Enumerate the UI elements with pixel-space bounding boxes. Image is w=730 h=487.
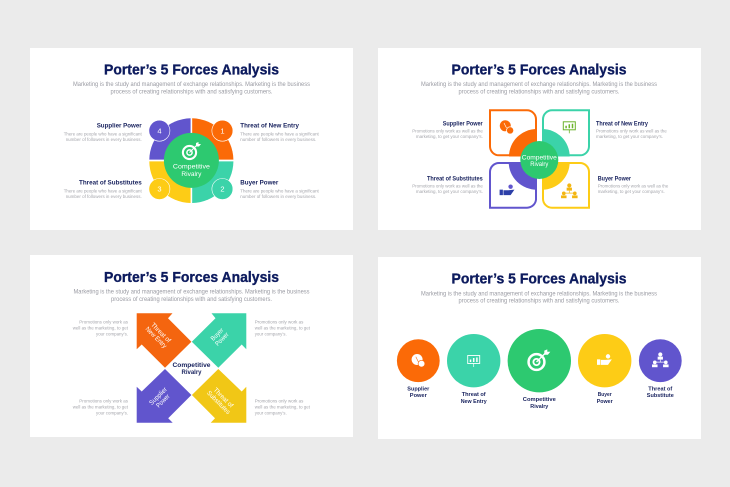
text block: buyer power bbox=[598, 175, 669, 195]
text block: buyer power bbox=[240, 180, 319, 200]
text block: threat of new entry: number of followers in every business. bbox=[240, 137, 316, 143]
circle: buyer power: Power bbox=[597, 399, 613, 405]
arrow: buyer power bbox=[192, 313, 246, 368]
icon: hierarchy bbox=[652, 352, 669, 367]
circle: threat of substitute: Substitute bbox=[647, 393, 675, 399]
text block: buyer power: Buyer Power bbox=[598, 175, 631, 182]
box: yellow with hierarchy icon bbox=[542, 162, 589, 208]
panel: rounded squares diagram bbox=[378, 48, 701, 230]
center label: competitive rivalry bbox=[172, 362, 211, 376]
arrow: buyer power: Power bbox=[214, 331, 231, 348]
subtitle: Marketing is the study and management of exchange relationships. Marketing is the business bbox=[73, 81, 311, 88]
hub: competitive rivalry bbox=[520, 141, 558, 179]
text block: threat of new entry: Threat of New Entry bbox=[596, 121, 648, 128]
subtitle: process of creating relationships with and satisfying customers. bbox=[110, 88, 273, 95]
text block: threat of substitutes: number of followers in every business. bbox=[66, 194, 142, 200]
circle: threat of new entry bbox=[447, 334, 500, 405]
arrow: threat of new entry: Threat of bbox=[149, 322, 172, 344]
icon: hand with coin bbox=[597, 354, 612, 365]
circle: buyer power bbox=[578, 334, 631, 405]
subtitle: process of creating relationships with and satisfying customers. bbox=[458, 88, 620, 95]
subtitle bbox=[74, 289, 310, 303]
text block: buyer power: Promotions only work as well as the bbox=[598, 183, 669, 189]
text block: top left: Promotions only work as bbox=[79, 320, 129, 326]
icon: target bbox=[183, 142, 201, 159]
text block: top right: your company’s. bbox=[255, 331, 287, 337]
arrow: threat of substitutes: Substitutes bbox=[205, 390, 232, 416]
box: teal with presentation icon bbox=[542, 110, 589, 156]
text block: threat of substitutes: Threat of Substitutes bbox=[427, 175, 483, 182]
hub: competitive rivalry: Rivalry bbox=[181, 171, 202, 178]
circle: threat of substitute bbox=[639, 339, 682, 399]
text block: bottom right: your company’s. bbox=[255, 410, 287, 416]
arrow: buyer power: Buyer bbox=[210, 326, 226, 342]
text block: threat of new entry: Promotions only work as well as the bbox=[596, 128, 667, 134]
text block: top left: your company’s. bbox=[96, 331, 128, 337]
quadrant: threat of new entry bbox=[192, 118, 233, 160]
text block: supplier power bbox=[412, 121, 483, 140]
icon: money bbox=[412, 354, 425, 367]
text block: supplier power: Supplier Power bbox=[97, 122, 142, 129]
arrow: threat of substitutes bbox=[192, 369, 246, 423]
hub: competitive rivalry: Rivalry bbox=[530, 161, 549, 168]
quadrant: threat of substitutes bbox=[149, 161, 191, 203]
text block: threat of substitutes: Promotions only work as well as the bbox=[412, 183, 483, 189]
text block: supplier power: Promotions only work as well as the bbox=[412, 128, 483, 134]
hub: competitive rivalry: Competitive bbox=[522, 154, 557, 161]
icon: presentation chart bbox=[468, 356, 480, 367]
title: Porter’s 5 Forces Analysis bbox=[104, 269, 279, 286]
quadrant: supplier power bbox=[149, 118, 191, 160]
title: Porter’s 5 Forces Analysis bbox=[452, 62, 626, 78]
circle: competitive rivalry: Competitive bbox=[523, 397, 557, 403]
text block: bottom left: your company’s. bbox=[96, 410, 128, 416]
text block: threat of new entry bbox=[596, 121, 667, 140]
icon: money bbox=[500, 120, 514, 134]
text block: buyer power: Buyer Power bbox=[240, 180, 279, 187]
text block: bottom left: Promotions only work as bbox=[79, 399, 129, 405]
title: Porter’s 5 Forces Analysis bbox=[452, 270, 626, 288]
arrow: threat of new entry: New Entry bbox=[144, 326, 168, 350]
text block: buyer power: There are people who have a significant bbox=[240, 188, 319, 194]
circle: threat of new entry: Threat of bbox=[462, 392, 486, 398]
hub: competitive rivalry bbox=[164, 133, 219, 188]
quadrant: buyer power bbox=[192, 161, 233, 203]
center label: competitive rivalry: Rivalry bbox=[182, 369, 202, 376]
arrow: supplier power: Power bbox=[155, 393, 172, 409]
box: purple with hand icon bbox=[490, 162, 537, 208]
text block: threat of substitutes: marketing, to get your company’s. bbox=[416, 189, 483, 195]
text block: supplier power: There are people who have a significant bbox=[64, 131, 142, 137]
icon: presentation chart bbox=[563, 122, 575, 133]
text block: threat of new entry: marketing, to get your company’s. bbox=[596, 134, 663, 140]
icon: target bbox=[529, 349, 550, 370]
text block: bottom left: well as the marketing, to get bbox=[73, 404, 129, 410]
subtitle bbox=[421, 81, 658, 95]
text block: top right: well as the marketing, to get bbox=[255, 325, 311, 331]
text block: top left bbox=[73, 320, 129, 337]
subtitle: process of creating relationships with and satisfying customers. bbox=[111, 296, 272, 303]
circle: supplier power: Supplier bbox=[407, 386, 430, 392]
text block: threat of new entry: There are people who have a significant bbox=[240, 131, 319, 137]
circle: competitive rivalry bbox=[508, 329, 571, 410]
text block: buyer power: number of followers in every business. bbox=[240, 194, 316, 200]
icon: hand with coin bbox=[500, 184, 514, 195]
quadrant: threat of substitutes: 3 bbox=[157, 185, 161, 194]
text block: threat of substitutes: Threat of Substitutes bbox=[79, 180, 142, 187]
text block: supplier power: number of followers in every business. bbox=[66, 137, 142, 143]
subtitle: Marketing is the study and management of exchange relationships. Marketing is the business bbox=[421, 290, 658, 297]
arrow: threat of substitutes: Threat of bbox=[212, 387, 234, 409]
text block: bottom left bbox=[73, 399, 129, 416]
subtitle: process of creating relationships with and satisfying customers. bbox=[458, 298, 620, 305]
text block: threat of substitutes bbox=[64, 180, 142, 200]
box: orange with money icon bbox=[490, 110, 537, 156]
circle: threat of new entry: New Entry bbox=[461, 399, 487, 405]
text block: supplier power bbox=[64, 122, 142, 143]
text block: threat of new entry: Threat of New Entry bbox=[240, 122, 299, 129]
quadrant: buyer power: 2 bbox=[220, 185, 224, 194]
text block: top right: Promotions only work as bbox=[255, 320, 304, 326]
circle: competitive rivalry: Rivalry bbox=[530, 404, 549, 410]
text block: threat of new entry bbox=[240, 122, 319, 143]
text block: threat of substitutes bbox=[412, 175, 483, 195]
quadrant: supplier power: 4 bbox=[157, 126, 161, 135]
text block: supplier power: Supplier Power bbox=[443, 121, 483, 128]
quadrant: threat of new entry: 1 bbox=[220, 126, 224, 135]
arrow: supplier power bbox=[137, 369, 191, 423]
center label: competitive rivalry: Competitive bbox=[172, 362, 211, 369]
subtitle bbox=[73, 81, 311, 95]
subtitle bbox=[421, 290, 658, 305]
arrow: supplier power: Supplier bbox=[148, 386, 169, 407]
panel: circles row diagram bbox=[378, 257, 701, 439]
text block: bottom right: well as the marketing, to get bbox=[255, 404, 311, 410]
arrow: threat of new entry bbox=[137, 313, 191, 368]
text block: bottom right bbox=[255, 399, 311, 416]
text block: top left: well as the marketing, to get bbox=[73, 325, 129, 331]
circle: supplier power bbox=[397, 339, 440, 399]
text block: top right bbox=[255, 320, 311, 337]
subtitle: Marketing is the study and management of exchange relationships. Marketing is the business bbox=[421, 81, 658, 88]
text block: supplier power: marketing, to get your company’s. bbox=[416, 134, 483, 140]
circle: threat of substitute: Threat of bbox=[648, 386, 672, 392]
circle: buyer power: Buyer bbox=[598, 392, 612, 398]
circle: supplier power: Power bbox=[410, 393, 428, 399]
text block: threat of substitutes: There are people who have a significant bbox=[64, 188, 142, 194]
hub: competitive rivalry: Competitive bbox=[173, 163, 210, 170]
text block: bottom right: Promotions only work as bbox=[255, 399, 304, 405]
subtitle: Marketing is the study and management of exchange relationships. Marketing is the business bbox=[74, 289, 310, 296]
title: Porter’s 5 Forces Analysis bbox=[104, 62, 279, 78]
text block: buyer power: marketing, to get your company’s. bbox=[598, 189, 665, 195]
panel: arrows diagram bbox=[30, 255, 353, 437]
panel: circular quadrant diagram bbox=[30, 48, 353, 230]
icon: hierarchy bbox=[561, 183, 578, 198]
